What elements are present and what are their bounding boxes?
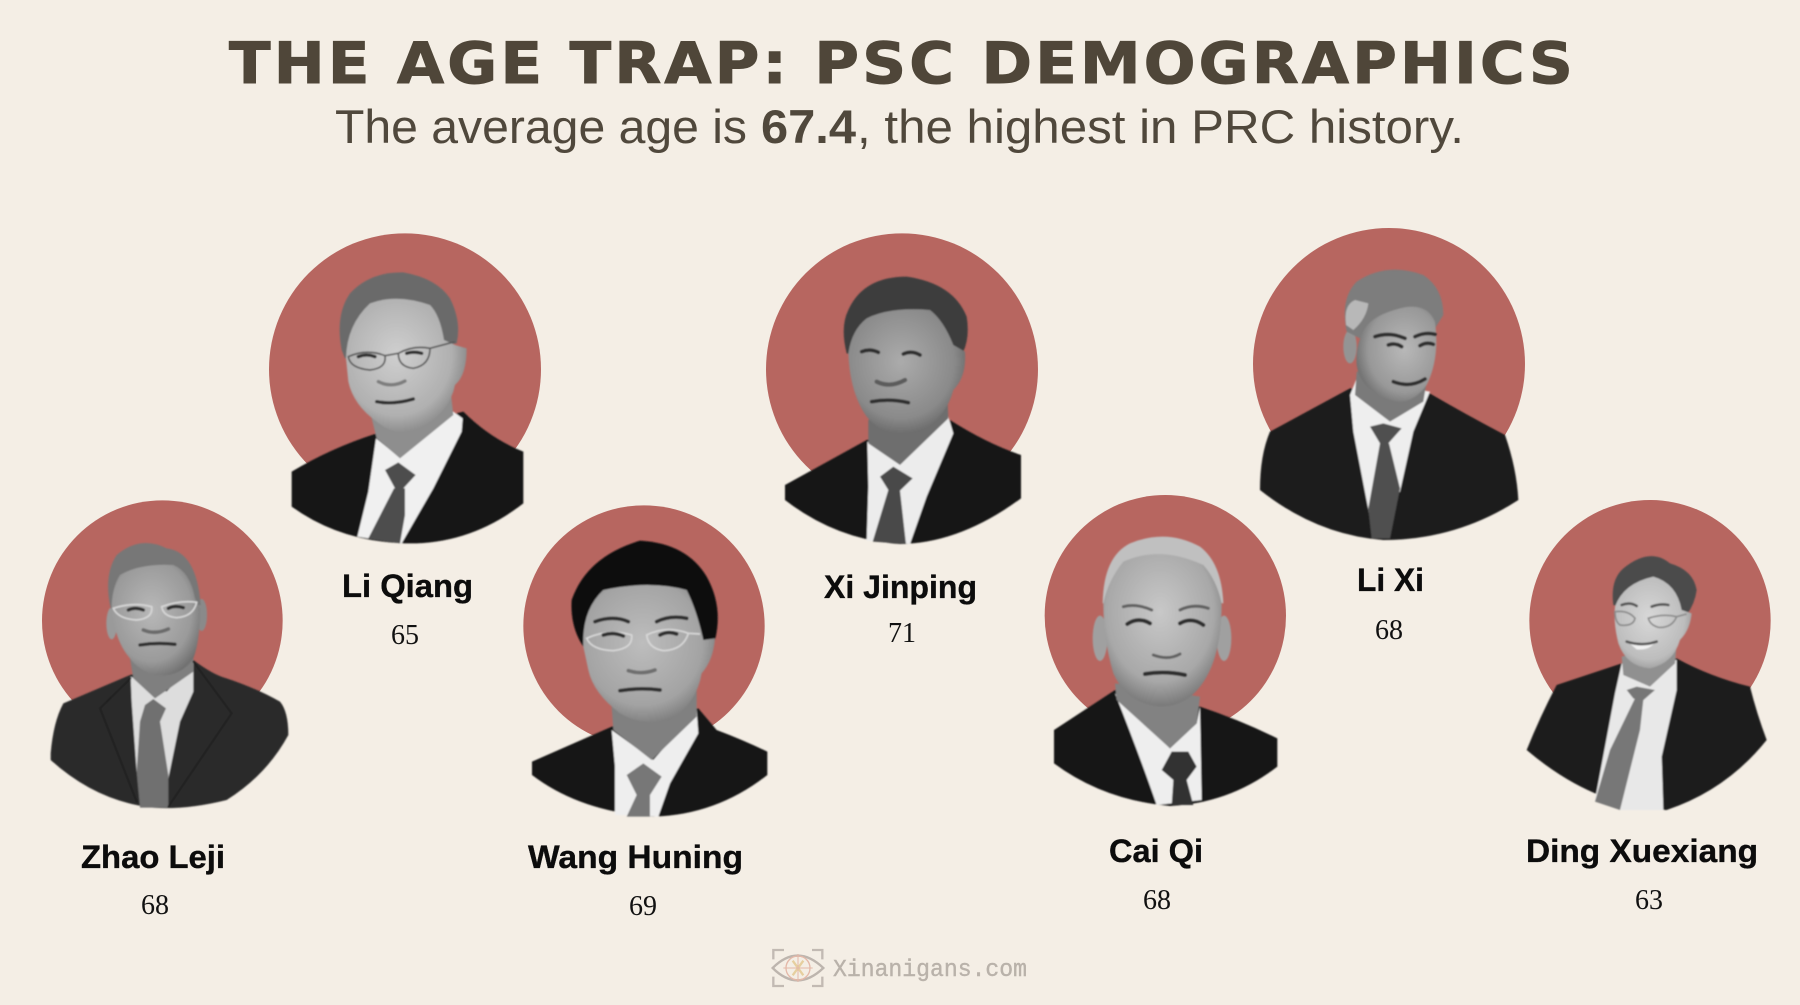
age: Ding Xuexiang: 63 xyxy=(1635,885,1663,916)
portrait: Cai Qi xyxy=(1045,495,1286,806)
portrait: Li Qiang xyxy=(269,233,541,543)
person: Li Xi xyxy=(1253,228,1525,646)
person: Zhao Leji xyxy=(42,500,288,921)
subtitle xyxy=(335,100,1464,153)
portrait: Li Xi xyxy=(1253,228,1525,540)
portrait: Xi Jinping xyxy=(766,233,1038,544)
name: Li Xi: Li Xi xyxy=(1357,562,1424,598)
logo text: Xinanigans.com xyxy=(833,957,1027,984)
icon: eye logo xyxy=(773,950,823,986)
age: Wang Huning: 69 xyxy=(629,891,657,922)
age: Li Xi: 68 xyxy=(1375,615,1403,646)
age: Cai Qi: 68 xyxy=(1143,885,1171,916)
name: Wang Huning: Wang Huning xyxy=(528,839,743,875)
logo: Xinanigans.com xyxy=(773,950,1027,986)
age: Li Qiang: 65 xyxy=(391,620,419,651)
name: Cai Qi: Cai Qi xyxy=(1109,833,1203,869)
person: Xi Jinping xyxy=(766,233,1038,649)
subtitle: 67.4 xyxy=(761,100,856,153)
age: Xi Jinping: 71 xyxy=(888,618,916,649)
name: Xi Jinping: Xi Jinping xyxy=(824,569,977,605)
person: Li Qiang xyxy=(269,233,541,651)
person: Wang Huning xyxy=(523,505,767,922)
name: Ding Xuexiang: Ding Xuexiang xyxy=(1526,833,1758,869)
subtitle: , the highest in PRC history. xyxy=(857,100,1464,153)
portrait: Zhao Leji xyxy=(42,500,288,808)
person: Ding Xuexiang xyxy=(1526,500,1771,916)
subtitle: The average age is xyxy=(335,100,747,153)
portrait: Ding Xuexiang xyxy=(1527,500,1771,810)
person: Cai Qi xyxy=(1045,495,1286,916)
name: Zhao Leji: Zhao Leji xyxy=(81,839,225,875)
age: Zhao Leji: 68 xyxy=(141,890,169,921)
title: THE AGE TRAP: PSC DEMOGRAPHICS xyxy=(229,31,1576,97)
portrait: Wang Huning xyxy=(523,505,767,817)
name: Li Qiang: Li Qiang xyxy=(342,568,473,604)
